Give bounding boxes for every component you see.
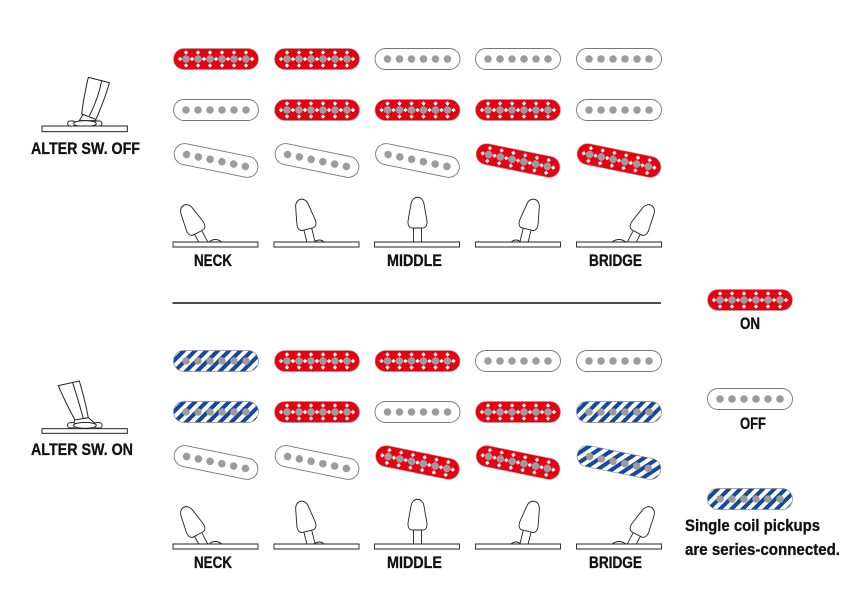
label: middle: MIDDLE (387, 554, 442, 572)
legend label: on: ON (740, 315, 760, 333)
legend label: single coil pickups: Single coil pickups (685, 517, 820, 535)
panel: alter switch on (31, 381, 133, 459)
legend: off pickup (708, 388, 792, 410)
panel: legend (685, 290, 840, 559)
label: bridge: BRIDGE (589, 252, 642, 270)
legend: series-connected pickup (708, 488, 792, 510)
row 1 pickups (174, 350, 662, 372)
icon: alter switch on toggle (42, 381, 127, 433)
panel: pickup grid switch on (172, 350, 663, 574)
label: neck: NECK (194, 252, 232, 270)
heading: alter switch on: ALTER SW. ON (31, 441, 133, 459)
row 3 angled pickups (172, 142, 663, 179)
selector switch positions (172, 197, 663, 272)
row 2 pickups (174, 402, 662, 422)
icon: alter switch off toggle (42, 77, 127, 132)
selector switch positions (172, 499, 663, 574)
label: bridge: BRIDGE (589, 554, 642, 572)
row 3 angled pickups (172, 444, 663, 481)
heading: alter switch off: ALTER SW. OFF (31, 140, 140, 158)
legend: on pickup (708, 290, 792, 310)
label: middle: MIDDLE (387, 252, 442, 270)
row 1 pickups (174, 48, 662, 70)
panel: pickup grid switch off (172, 48, 663, 272)
label: neck: NECK (194, 554, 232, 572)
panel: alter switch off (31, 77, 140, 158)
row 2 pickups (174, 100, 662, 120)
legend label: off: OFF (740, 415, 766, 433)
